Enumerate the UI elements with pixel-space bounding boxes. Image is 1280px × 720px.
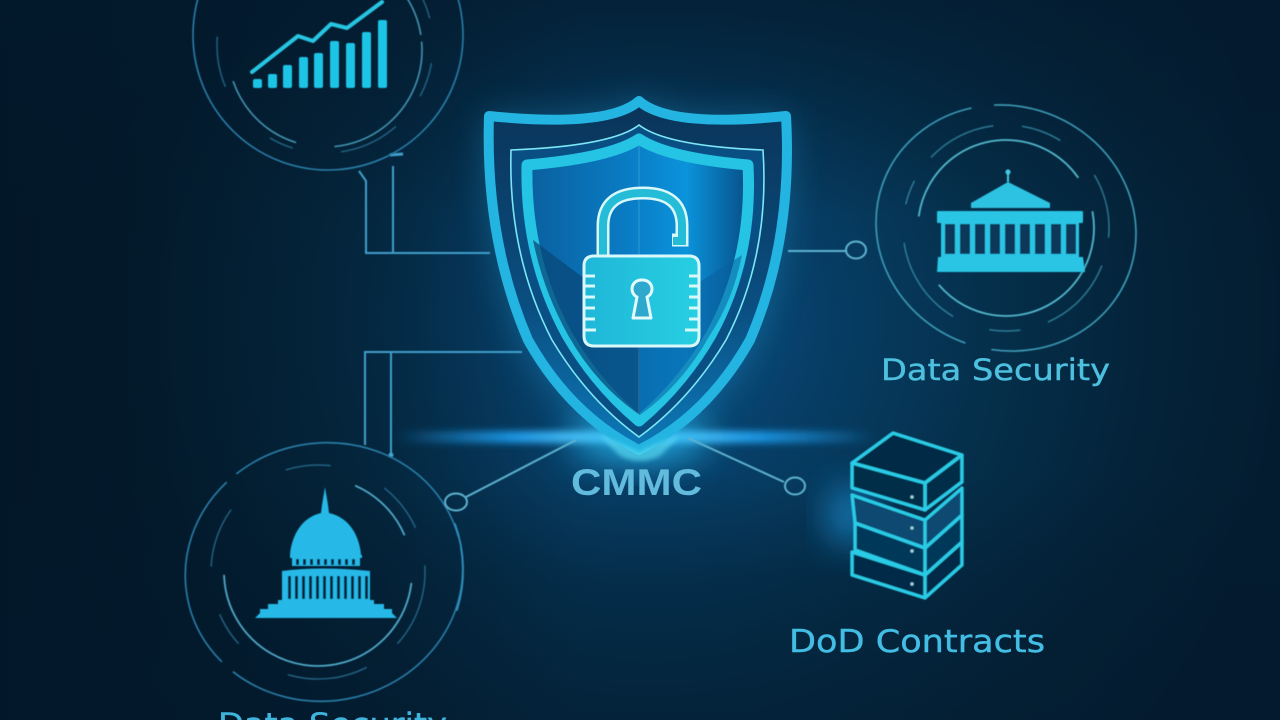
server layer 1 — [852, 433, 962, 510]
icon: open padlock — [584, 193, 699, 346]
server layer 4 — [852, 542, 962, 598]
icon: capitol dome — [255, 487, 397, 618]
shield lower facets — [533, 240, 640, 415]
server layer 3 — [855, 515, 962, 575]
label: DoD Contracts: DoD Contracts — [789, 624, 1045, 660]
icon: keyhole — [632, 280, 652, 318]
bright tip of shield — [600, 436, 680, 461]
connector line and node: right — [788, 242, 866, 258]
shield outer band — [489, 101, 787, 450]
horizontal light flare — [395, 414, 875, 462]
shield — [486, 98, 789, 455]
shield inner outline — [511, 125, 764, 437]
circle frame: capitol — [165, 421, 483, 720]
circle frame: chart — [149, 0, 507, 214]
label: Data Security (right): Data Security — [881, 353, 1110, 387]
circle frame: government building — [841, 69, 1171, 387]
label: CMMC: CMMC — [571, 462, 702, 503]
connector lines: left circuit traces — [359, 154, 522, 456]
icon: government building — [937, 169, 1085, 272]
glow behind server — [828, 485, 872, 545]
icon: growth bar chart — [252, 2, 387, 88]
icon: server stack — [852, 433, 962, 598]
shield inner panel — [527, 139, 749, 421]
connector lines: lower nodes — [445, 438, 805, 510]
shield glow — [486, 98, 789, 455]
server layer 2 — [852, 488, 962, 548]
